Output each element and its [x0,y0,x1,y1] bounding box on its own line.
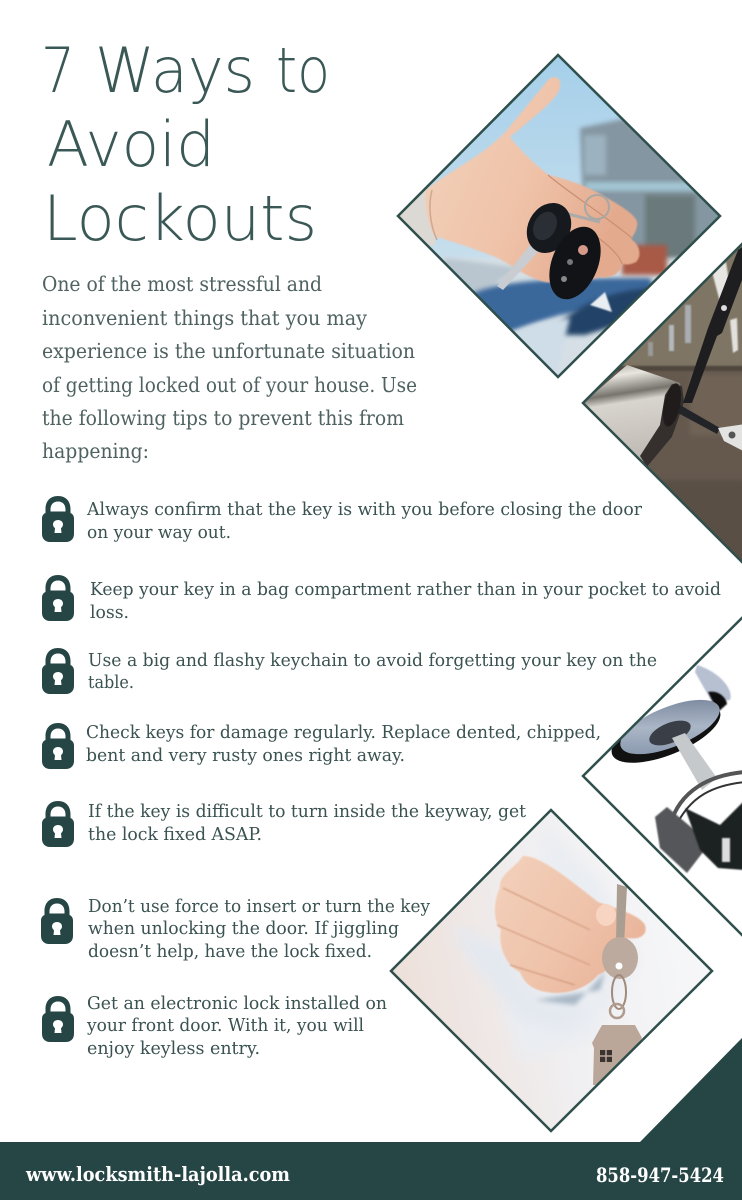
tip 7 [42,993,387,1059]
title: to [276,34,330,107]
tip 4 [42,722,601,769]
photo: hand holding house key [388,805,718,1135]
tip 2: loss. [90,602,129,623]
intro text block: inconvenient things that you may [42,306,367,330]
title: Avoid [47,108,215,181]
tip 6: Don’t use force to insert or turn the key [88,896,431,917]
title: 7 [41,34,75,107]
intro text block: experience is the unfortunate situation [42,339,415,363]
icon: padlock [41,898,73,944]
tip 1 [42,496,642,543]
tip 5: If the key is difficult to turn inside the keyway, get [88,801,527,822]
photo: hand holding car keys [395,50,725,383]
tip 6: when unlocking the door. If jiggling [88,918,399,939]
intro text block [42,272,417,463]
tip 7: your front door. With it, you will [86,1015,364,1036]
tip 6: doesn’t help, have the lock fixed. [88,941,372,962]
tip 4: Check keys for damage regularly. Replace dented, chipped, [86,722,601,743]
icon: padlock [42,496,74,542]
tip 5 [42,801,527,847]
intro text block: One of the most stressful and [42,272,322,296]
tip 2 [42,575,721,623]
tip 7: Get an electronic lock installed on [87,993,387,1014]
icon: padlock [42,723,74,769]
tip 1: on your way out. [87,522,231,543]
tip 7: enjoy keyless entry. [87,1038,260,1059]
intro text block: happening: [42,439,149,463]
icon: padlock [42,648,74,694]
icon: padlock [42,575,74,621]
icon: padlock [42,996,74,1042]
tip 3: Use a big and flashy keychain to avoid forgetting your key on the [88,650,657,671]
title: Lockouts [43,182,317,255]
title [41,34,330,255]
icon: padlock [42,801,74,847]
tip 2: Keep your key in a bag compartment rather than in your pocket to avoid [90,579,721,600]
tip 4: bent and very rusty ones right away. [86,745,405,766]
photo: broken key lock cylinder [581,242,742,564]
title: Ways [95,34,255,107]
tip 3: table. [88,672,134,693]
website url: www.locksmith-lajolla.com [25,1162,290,1186]
intro text block: the following tips to prevent this from [42,406,404,430]
tip 1: Always confirm that the key is with you before closing the door [86,499,642,520]
tip 6 [41,896,431,962]
tip 5: the lock fixed ASAP. [88,824,262,845]
intro text block: of getting locked out of your house. Use [42,373,417,397]
photo: key ring in lock [581,616,742,937]
tip 3 [42,648,657,694]
footer band [0,1038,742,1200]
